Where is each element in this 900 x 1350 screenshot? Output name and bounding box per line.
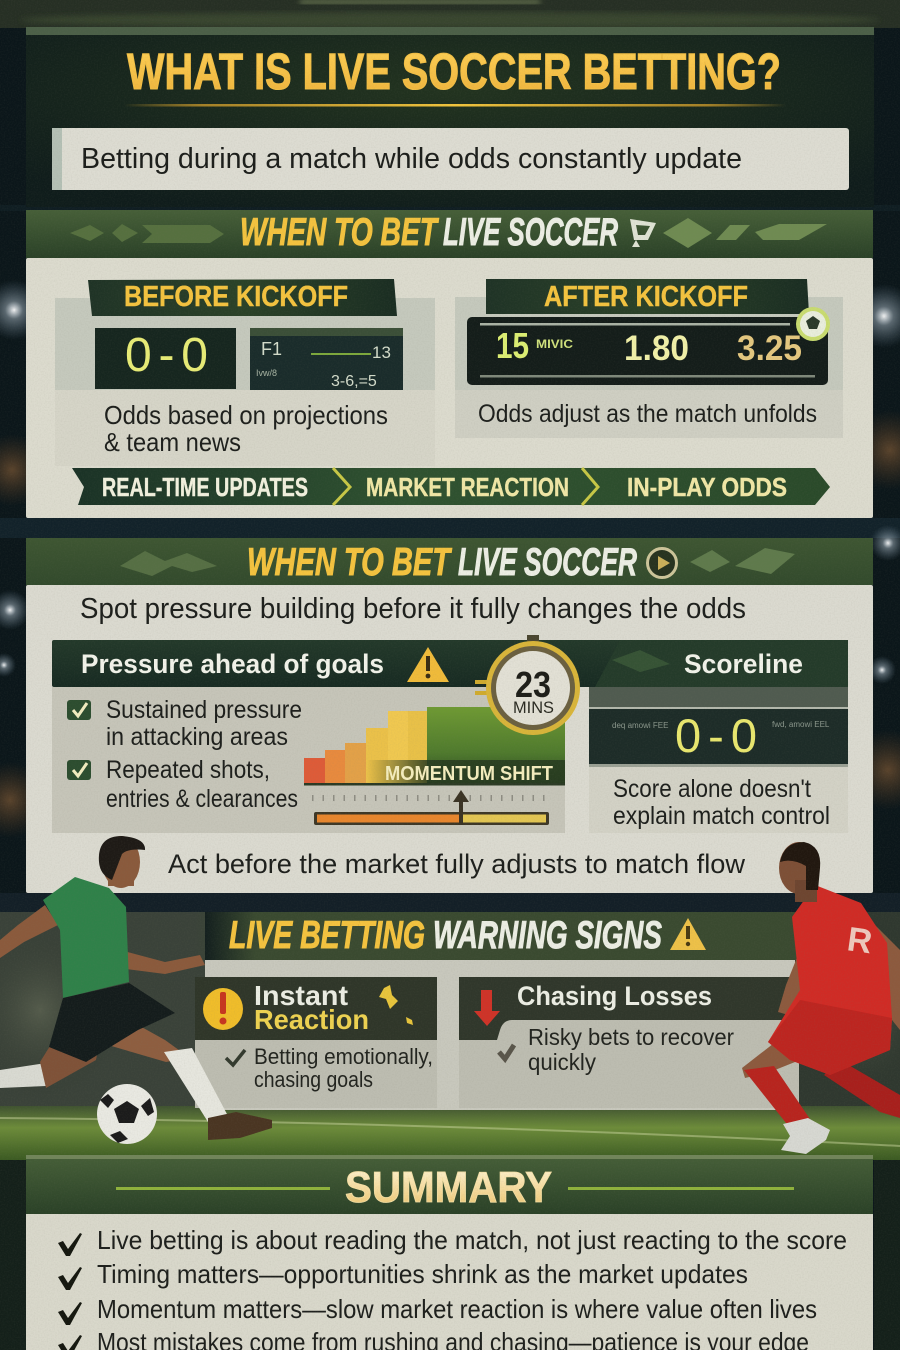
icon: stopwatch 23 mins bbox=[475, 635, 580, 735]
section header: WHEN TO BET bbox=[247, 541, 452, 584]
section header: WARNING SIGNS bbox=[433, 914, 662, 957]
header strip bbox=[52, 640, 848, 687]
panel: warning signs bbox=[195, 912, 800, 1110]
card: instant reaction: Reaction bbox=[254, 1004, 369, 1035]
panel: scoreline bbox=[589, 649, 848, 833]
checklist: in attacking areas bbox=[106, 723, 288, 751]
definition strip bbox=[52, 128, 849, 190]
process arrow band: REAL-TIME UPDATES bbox=[102, 472, 308, 502]
scoreboard 0-0: deq amowi FEE bbox=[612, 721, 668, 730]
projection text: Odds based on projections bbox=[104, 400, 388, 430]
panel: scoreline: Score alone doesn't bbox=[613, 775, 811, 803]
live odds board: MIVIC bbox=[536, 337, 573, 351]
card: instant reaction: chasing goals bbox=[254, 1067, 373, 1092]
soccer ball bbox=[97, 1084, 157, 1144]
lead text: Spot pressure building before it fully changes the odds bbox=[80, 593, 746, 625]
definition strip: Betting during a match while odds constantly update bbox=[81, 143, 742, 175]
projection text bbox=[104, 400, 388, 457]
odds board: Ivw/8 bbox=[256, 368, 277, 378]
section header: LIVE SOCCER bbox=[458, 541, 637, 584]
checklist item 2: Timing matters—opportunities shrink as the market updates bbox=[97, 1259, 748, 1289]
section header bbox=[26, 538, 873, 585]
panel: title bbox=[26, 27, 874, 207]
icon: stopwatch 23 mins: 23 bbox=[515, 664, 551, 705]
odds board bbox=[250, 328, 403, 390]
player: red kit defender bbox=[742, 842, 900, 1154]
icon: stopwatch 23 mins: MINS bbox=[513, 698, 554, 717]
checklist: entries & clearances bbox=[106, 785, 298, 813]
closing text: Act before the market fully adjusts to match flow bbox=[168, 849, 746, 879]
panel: summary bbox=[26, 1155, 873, 1350]
process arrow band: IN-PLAY ODDS bbox=[627, 472, 787, 502]
scoreboard 0-0: 0-0 bbox=[125, 329, 208, 382]
card: chasing losses: Chasing Losses bbox=[517, 981, 712, 1011]
icon: soccer ball bbox=[796, 307, 830, 341]
checklist bbox=[67, 696, 302, 813]
icon: play bbox=[648, 548, 676, 578]
icon: flag bbox=[630, 219, 656, 247]
section header bbox=[195, 912, 800, 960]
live odds board: 3.25 bbox=[737, 329, 802, 368]
scoreboard 0-0 bbox=[589, 687, 848, 767]
section header: WHEN TO BET bbox=[240, 211, 439, 254]
icon: down arrow bbox=[474, 990, 500, 1026]
checklist: Sustained pressure bbox=[106, 696, 302, 724]
live odds board: 15 bbox=[496, 325, 529, 366]
checklist: Repeated shots, bbox=[106, 756, 270, 784]
summary header: SUMMARY bbox=[345, 1163, 552, 1212]
odds board: F1 bbox=[261, 339, 282, 359]
card: chasing losses: quickly bbox=[528, 1049, 596, 1075]
player: red kit defender: R bbox=[845, 920, 874, 961]
panel: before kickoff bbox=[55, 279, 435, 466]
card: instant reaction bbox=[195, 977, 437, 1108]
card: chasing losses: Risky bets to recover bbox=[528, 1024, 734, 1050]
after kickoff label: AFTER KICKOFF bbox=[544, 281, 748, 313]
panel: when to bet before and after kickoff bbox=[26, 210, 873, 518]
icon: warning triangle bbox=[670, 918, 706, 950]
summary header bbox=[26, 1155, 873, 1214]
player: green kit striker bbox=[0, 836, 272, 1140]
after kickoff label bbox=[486, 279, 809, 314]
card: instant reaction: Betting emotionally, bbox=[254, 1044, 433, 1069]
card: chasing losses bbox=[459, 977, 800, 1108]
process arrow band: MARKET REACTION bbox=[366, 472, 569, 502]
panel: scoreline: explain match control bbox=[613, 802, 830, 830]
checklist item 3: Momentum matters—slow market reaction is where value often lives bbox=[97, 1294, 817, 1324]
section header: LIVE SOCCER bbox=[443, 211, 618, 254]
live odds board: 1.80 bbox=[624, 329, 689, 368]
scoreboard 0-0: fwd, amowi EEL bbox=[772, 720, 830, 729]
icon: warning triangle bbox=[407, 647, 449, 682]
scoreboard 0-0: 0-0 bbox=[675, 709, 757, 762]
momentum bar chart bbox=[304, 707, 565, 786]
panel: pressure ahead of goals: Pressure ahead of goals bbox=[81, 649, 384, 679]
panel: scoreline: Scoreline bbox=[684, 649, 803, 679]
section header bbox=[26, 210, 873, 258]
card: instant reaction: Instant bbox=[254, 980, 348, 1011]
momentum slider with arrow bbox=[312, 790, 552, 825]
panel: pressure ahead of goals bbox=[52, 647, 565, 833]
live odds board bbox=[467, 317, 828, 385]
projection text: & team news bbox=[104, 427, 241, 457]
odds board: 13 bbox=[372, 343, 391, 362]
odds board: 3-6,=5 bbox=[331, 373, 377, 390]
panel: pressure and momentum bbox=[26, 538, 873, 893]
panel: after kickoff bbox=[455, 279, 843, 438]
scoreboard 0-0 bbox=[95, 328, 236, 389]
checklist item 1: Live betting is about reading the match, not just reacting to the score bbox=[97, 1225, 847, 1255]
after kickoff text: Odds adjust as the match unfolds bbox=[478, 400, 817, 428]
momentum bar chart: MOMENTUM SHIFT bbox=[385, 763, 553, 785]
before kickoff label: BEFORE KICKOFF bbox=[124, 281, 348, 313]
section header: LIVE BETTING bbox=[229, 914, 425, 957]
title underline bbox=[124, 104, 786, 106]
process arrow band bbox=[72, 468, 830, 505]
icon: exclamation bbox=[203, 988, 243, 1030]
